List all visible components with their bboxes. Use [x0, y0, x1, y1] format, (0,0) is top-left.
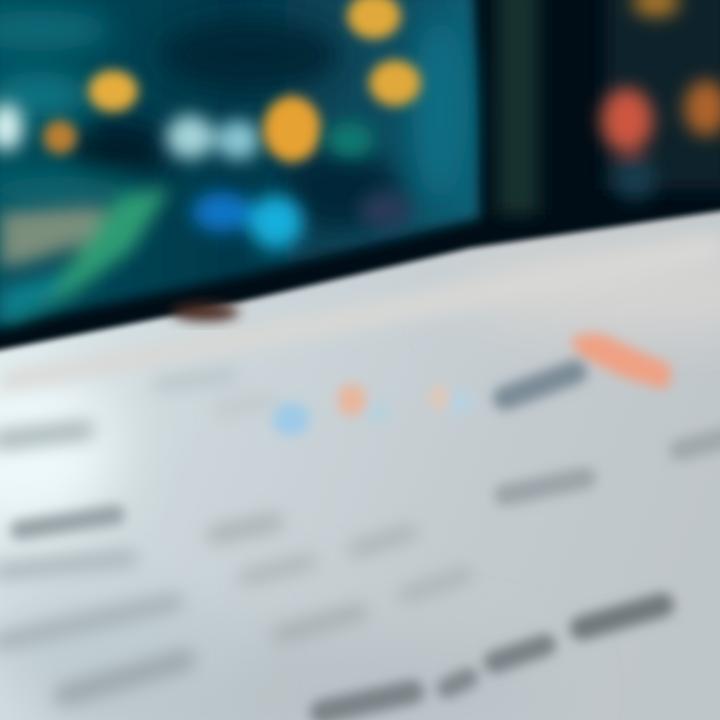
bezel stripe [497, 0, 720, 215]
screen dark panels [0, 10, 468, 230]
reddish stand shadow [171, 303, 239, 321]
amber dots [43, 0, 421, 162]
dark monitor background [0, 0, 720, 354]
orange highlight [572, 333, 672, 390]
blurred text smudges on paper [0, 372, 720, 712]
paper top edge highlight [0, 232, 720, 392]
dark smudges [20, 372, 720, 712]
bright blue bars [192, 192, 303, 249]
right monitor lights [601, 0, 720, 200]
screen chart details [0, 0, 468, 325]
pale blue glow [166, 115, 260, 160]
white glow left [0, 103, 23, 151]
grey and green wedge [0, 188, 170, 325]
monitor screen [0, 0, 480, 328]
coloured marks on paper [272, 333, 672, 436]
muted violet smudge [359, 192, 411, 228]
lighter smudges [0, 375, 465, 695]
green glow [326, 122, 374, 158]
